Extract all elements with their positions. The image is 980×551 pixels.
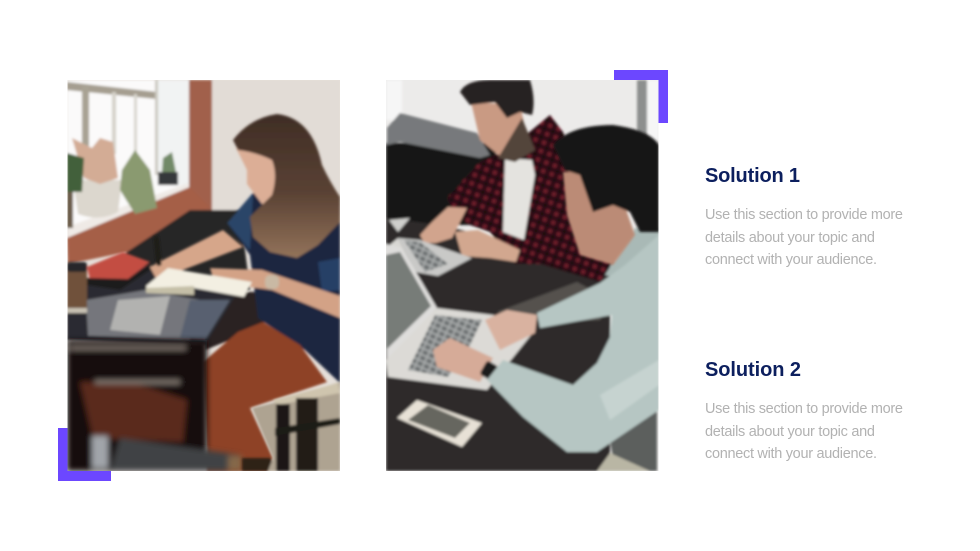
pen	[154, 236, 162, 266]
text block: Solution 2 description: details about your topic and	[705, 424, 875, 440]
notebook	[146, 268, 252, 297]
shirt	[227, 193, 340, 383]
table	[386, 218, 610, 471]
bench	[386, 143, 496, 225]
photo: woman writing at a cafe table	[67, 80, 340, 471]
book and coffee	[87, 252, 150, 280]
text block: Solution 2 description	[705, 401, 903, 462]
hands	[420, 207, 467, 243]
text block: Solution 1 description	[705, 207, 903, 268]
foreground man's head	[553, 125, 659, 265]
shadow under the table	[205, 292, 265, 350]
gray clothing and cream fabric	[610, 410, 657, 471]
phone	[397, 400, 482, 447]
text block: Solution 1 description: Use this section to provide more	[705, 207, 903, 223]
hair and face	[236, 145, 280, 205]
plants	[73, 180, 122, 218]
text block: Solution 1 description: connect with your audience.	[705, 252, 877, 268]
back laptop	[398, 238, 472, 276]
front laptop	[386, 244, 437, 362]
foreground chair and bag	[67, 340, 242, 471]
hands on laptop	[485, 310, 537, 350]
bracket accent: bottom left	[58, 428, 111, 481]
text block: Solution 1 description: details about your topic and	[705, 230, 875, 246]
photo: two men working on laptops	[386, 80, 659, 471]
text block: Solution 2 description: Use this section to provide more	[705, 401, 903, 417]
arms	[150, 230, 243, 282]
text block: Solution 2 description: connect with your audience.	[705, 446, 877, 462]
floor and stool	[242, 382, 340, 471]
light shirt sleeve	[487, 235, 659, 452]
heading: Solution 2: Solution 2	[705, 359, 801, 381]
shirt collar	[605, 228, 659, 280]
head	[471, 102, 530, 160]
table top	[67, 265, 235, 345]
bracket accent: top right	[614, 70, 668, 123]
pants	[203, 322, 327, 471]
heading: Solution 1: Solution 1	[705, 165, 800, 187]
plaid shirt	[447, 115, 613, 282]
